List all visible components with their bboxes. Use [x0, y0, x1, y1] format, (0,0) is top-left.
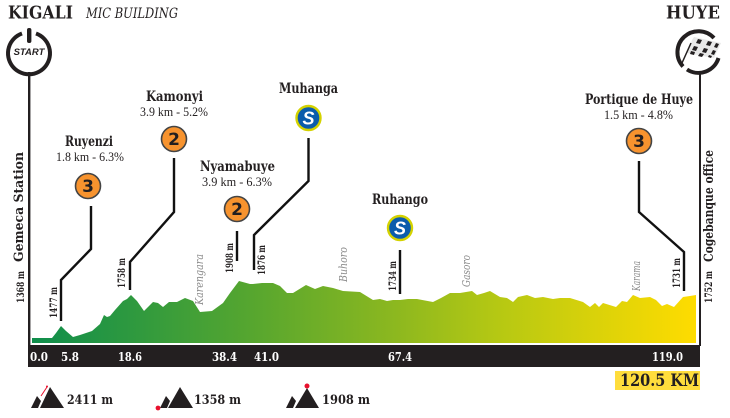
distance markers: [30, 349, 683, 364]
climb: Ruyenzi: [48, 134, 124, 321]
distance bar: [28, 345, 700, 367]
climb: Portique de Huye: Portique de Huye: [585, 92, 693, 108]
finish pole: [699, 72, 701, 346]
icon: start: START: [14, 47, 46, 58]
climb: Nyamabuye: Nyamabuye: [200, 159, 275, 175]
climb: Ruyenzi: 1477 m: [48, 287, 60, 318]
climb: Ruyenzi: 3: [82, 177, 94, 197]
distance markers: 119.0: [652, 349, 683, 364]
sprint: Muhanga: S: [302, 108, 315, 128]
start elevation: 1368 m: [15, 271, 27, 303]
distance markers: 67.4: [388, 349, 412, 364]
stat: highest point: [286, 384, 370, 408]
distance markers: 38.4: [212, 349, 237, 364]
sprint: Ruhango: [372, 192, 428, 294]
place: Karama: Karama: [630, 261, 643, 292]
climb: Nyamabuye: 3.9 km - 6.3%: [202, 174, 272, 189]
elevation profile: [32, 281, 696, 343]
distance markers: 0.0: [30, 349, 48, 364]
climb: Portique de Huye: 1731 m: [671, 258, 683, 288]
climb: Kamonyi: [116, 89, 208, 290]
place: Karengara: Karengara: [193, 254, 206, 306]
climb: Kamonyi: 3.9 km - 5.2%: [140, 104, 208, 119]
start location label: Gemeca Station: [12, 151, 27, 262]
climb: Kamonyi: 1758 m: [116, 258, 128, 288]
climb: Nyamabuye: 2: [231, 200, 243, 220]
climb: Ruyenzi: 1.8 km - 6.3%: [56, 149, 124, 164]
sprint: Muhanga: [254, 81, 338, 275]
place: Buhoro: Buhoro: [337, 247, 350, 283]
climb: Kamonyi: 2: [168, 130, 180, 150]
sprint: Ruhango: Ruhango: [372, 192, 428, 208]
climb: Portique de Huye: 1.5 km - 4.8%: [604, 107, 673, 122]
sprint: Muhanga: 1876 m: [256, 245, 268, 275]
icon: finish flag: [677, 31, 721, 73]
stat: lowest point: 1358 m: [194, 393, 241, 408]
start heading: KIGALI: [8, 2, 73, 24]
finish heading: HUYE: [666, 2, 720, 24]
finish elevation: 1752 m: [703, 271, 715, 303]
sprint: Ruhango: S: [394, 218, 406, 238]
start venue: MIC BUILDING: [85, 6, 178, 22]
stat: highest point: 1908 m: [322, 393, 370, 408]
distance markers: 18.6: [118, 349, 142, 364]
climb: Kamonyi: Kamonyi: [146, 89, 203, 105]
climb: Portique de Huye: 3: [633, 132, 645, 152]
climb: Portique de Huye: [585, 92, 693, 291]
climb: Ruyenzi: Ruyenzi: [65, 134, 113, 150]
sprint: Muhanga: Muhanga: [279, 81, 338, 97]
distance markers: 5.8: [61, 349, 79, 364]
stat: total climb: [31, 386, 113, 408]
icon: start: [8, 28, 50, 74]
stat: total climb: 2411 m: [67, 393, 113, 408]
place: Gasoro: Gasoro: [460, 255, 473, 287]
finish location label: Cogebanque office: [702, 150, 717, 262]
start pole: [28, 72, 30, 346]
climb: Nyamabuye: [200, 159, 275, 273]
stat: lowest point: [156, 387, 241, 410]
climb: Nyamabuye: 1908 m: [224, 243, 236, 273]
total distance: 120.5 KM: [620, 371, 699, 391]
sprint: Ruhango: 1734 m: [387, 261, 399, 291]
distance markers: 41.0: [254, 349, 279, 364]
